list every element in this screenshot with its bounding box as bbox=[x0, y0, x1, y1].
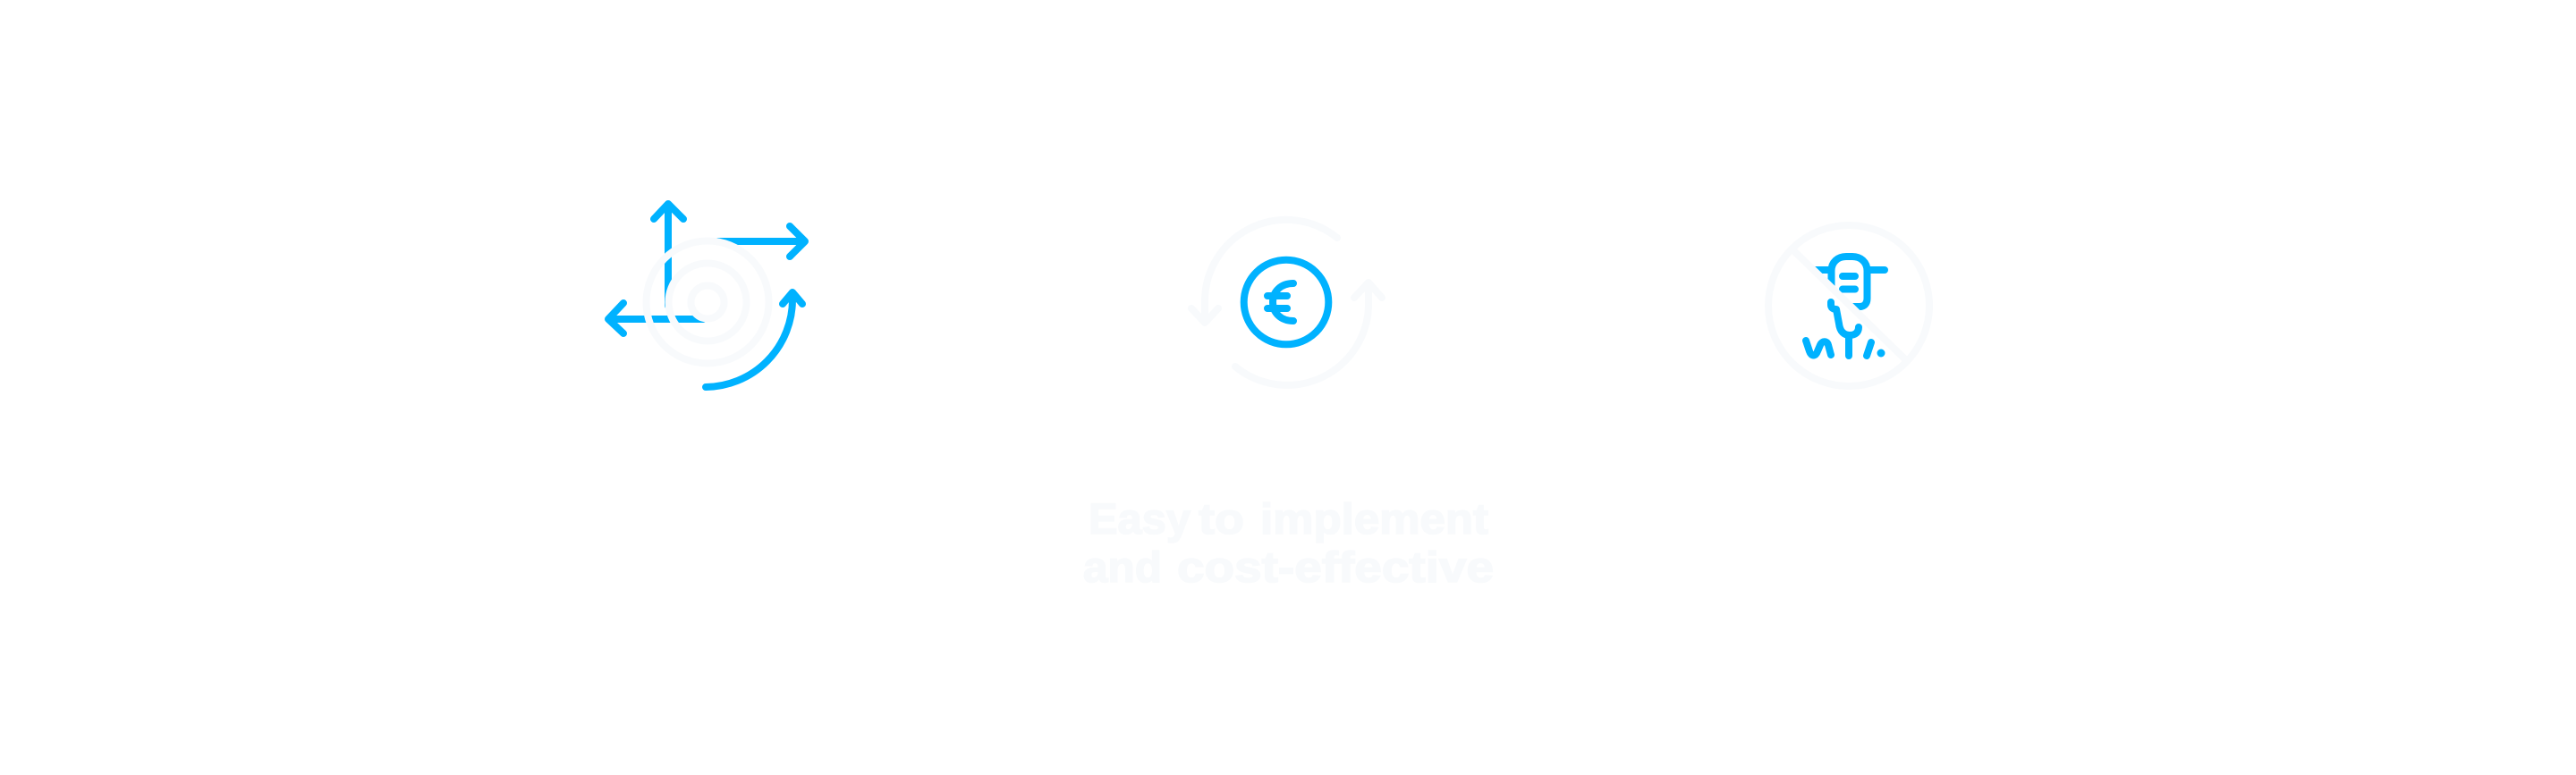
prohibition ring bbox=[1768, 225, 1929, 386]
heading line 1: to bbox=[1199, 496, 1244, 543]
heading line 2: cost-effective bbox=[1177, 544, 1494, 592]
circular arrow: bottom right bbox=[1235, 282, 1382, 385]
ground marks bbox=[1806, 336, 1871, 356]
debris dot bbox=[1877, 349, 1885, 358]
heading line 1 bbox=[1089, 496, 1488, 543]
target rings bbox=[646, 241, 769, 363]
arrow: curved bbox=[706, 292, 802, 387]
coin bbox=[1244, 260, 1328, 344]
heading bbox=[1083, 496, 1494, 592]
icon: euro coin with circular arrows bbox=[1191, 220, 1382, 385]
icon: crossed-out jackhammer bbox=[1802, 253, 1888, 359]
heading line 2: and bbox=[1083, 544, 1162, 592]
arrow: left bbox=[608, 303, 703, 333]
icon: directional arrows with target rings bbox=[608, 204, 805, 387]
jackhammer chisel bbox=[1831, 302, 1859, 335]
heading line 1: implement bbox=[1260, 496, 1488, 543]
heading line 1: Easy bbox=[1089, 496, 1191, 543]
prohibition slash bbox=[1793, 250, 1905, 359]
heading line 2 bbox=[1083, 544, 1494, 592]
euro symbol bbox=[1267, 283, 1293, 321]
arrow: right bbox=[718, 226, 805, 257]
jackhammer handle and body bbox=[1802, 257, 1885, 307]
arrow: up bbox=[654, 204, 683, 306]
circular arrow: top left bbox=[1191, 220, 1337, 323]
